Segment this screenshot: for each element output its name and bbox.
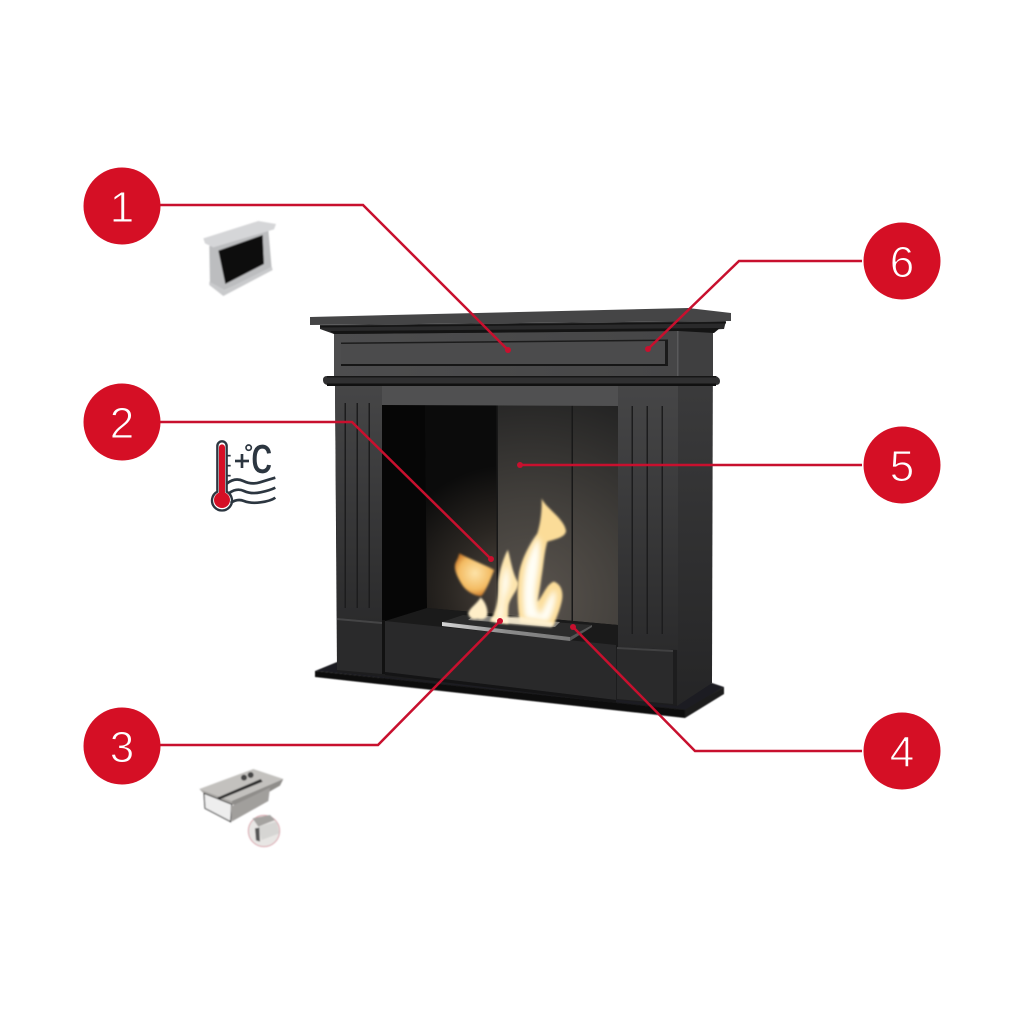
main tall flame — [518, 498, 566, 626]
top shelf — [310, 308, 731, 334]
marker 2: 2 — [110, 399, 134, 448]
center plinth — [385, 621, 616, 700]
fireplace illustration — [310, 308, 731, 718]
torus moulding — [323, 376, 720, 386]
marker 6 — [864, 222, 940, 300]
marker 1 — [84, 168, 160, 244]
left column — [335, 384, 385, 674]
marker 4 — [864, 712, 940, 790]
flames — [455, 498, 566, 627]
icon: mantel frame — [203, 221, 276, 296]
marker 3 — [84, 708, 160, 784]
marker 4: 4 — [890, 728, 914, 777]
marker 1: 1 — [110, 183, 134, 232]
right side of body — [677, 332, 713, 706]
callout lines — [160, 205, 862, 751]
marker 5 — [864, 426, 940, 504]
right column — [617, 384, 678, 704]
left detached flame — [455, 553, 494, 596]
marker 6: 6 — [890, 238, 914, 287]
frieze — [334, 329, 713, 379]
marker 5: 5 — [890, 442, 914, 491]
base slab — [315, 662, 724, 718]
marker 3: 3 — [110, 723, 134, 772]
small base flame — [468, 597, 488, 619]
body underlay — [335, 384, 678, 706]
burner — [442, 615, 592, 641]
firebox interior — [382, 405, 618, 648]
marker 2 — [84, 384, 160, 460]
icon: thermometer with heat waves — [212, 441, 275, 511]
icon: bio-ethanol burner — [199, 769, 283, 847]
lintel — [382, 386, 618, 406]
burner glow — [490, 617, 553, 627]
middle flame — [490, 549, 518, 624]
